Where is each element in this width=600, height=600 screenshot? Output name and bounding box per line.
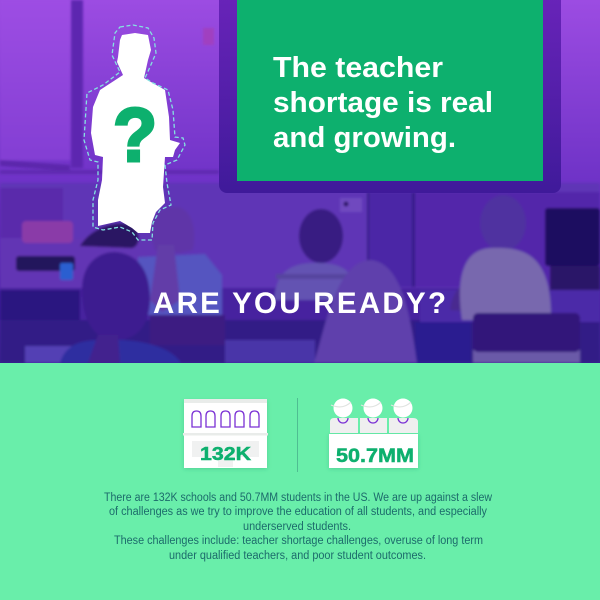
icon: students	[329, 398, 418, 468]
heading: teacher shortage: shortage is real	[273, 87, 493, 119]
heading: are you ready: ARE YOU READY?	[153, 287, 446, 320]
panel: classroom photo	[0, 0, 600, 363]
heading: teacher shortage: and growing.	[273, 122, 456, 154]
text block: description: There are 132K schools and 50.7MM students in the US. We are up against a slew	[104, 492, 493, 504]
icon: students: 50.7MM	[336, 445, 414, 467]
panel: screen frame	[219, 0, 561, 193]
heading: teacher shortage	[273, 52, 493, 154]
text block: description: under qualified teachers, and poor student outcomes.	[169, 550, 426, 562]
icon: school building: 132K	[200, 443, 252, 464]
text block: description	[104, 492, 493, 562]
icon: school building	[183, 399, 268, 468]
divider	[297, 398, 298, 472]
text block: description: of challenges as we try to improve the education of all students, and especially	[109, 506, 487, 518]
icon: teacher silhouette: ?	[113, 92, 157, 177]
text block: description: underserved students.	[243, 521, 351, 533]
icon: teacher silhouette	[84, 25, 185, 240]
text block: description: These challenges include: teacher shortage challenges, overuse of long term	[114, 535, 483, 547]
heading: teacher shortage: The teacher	[273, 52, 443, 84]
panel: statistics background	[0, 363, 600, 600]
